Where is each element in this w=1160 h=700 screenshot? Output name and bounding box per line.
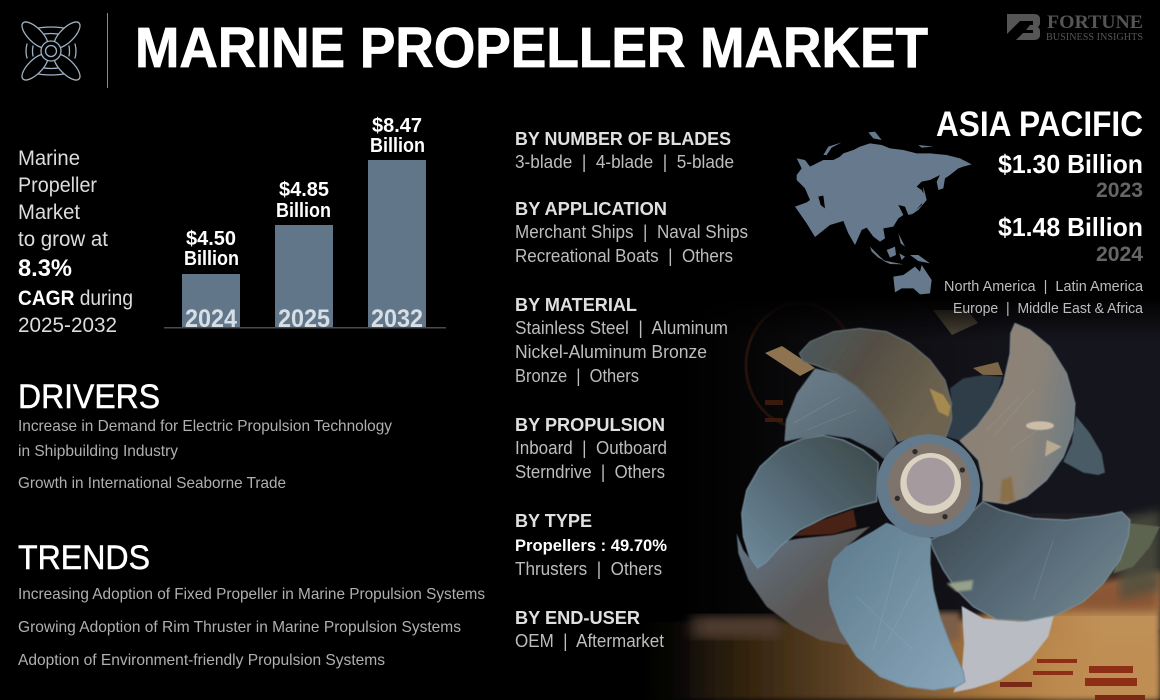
regional stats: $1.30 Billion (998, 149, 1143, 179)
segment: by material: Stainless Steel | Aluminum (515, 318, 728, 338)
drivers panel: Growth in International Seaborne Trade (18, 475, 286, 492)
drivers panel: in Shipbuilding Industry (18, 443, 178, 460)
growth text block: 8.3% (18, 255, 72, 282)
trends panel (18, 539, 485, 669)
photo backdrop: dock and floor (640, 296, 1160, 700)
segment: by number of blades: BY NUMBER OF BLADES (515, 128, 731, 149)
segment: by material: Nickel-Aluminum Bronze (515, 342, 707, 362)
back blade upper right (947, 375, 1003, 441)
trends panel: Growing Adoption of Rim Thruster in Marine Propulsion Systems (18, 619, 461, 636)
segment: by number of blades (515, 128, 734, 172)
bar 2032: Billion (370, 135, 425, 157)
blade left (742, 435, 878, 568)
trends panel: Increasing Adoption of Fixed Propeller in Marine Propulsion Systems (18, 586, 485, 603)
back blade upper left (784, 368, 897, 460)
icon: propeller (18, 18, 84, 84)
segment: by propulsion: Sterndrive | Others (515, 462, 665, 482)
segment: by application (515, 198, 748, 266)
drivers panel: DRIVERS (18, 378, 160, 416)
growth text block: CAGR during (18, 287, 133, 310)
segment: by propulsion: BY PROPULSION (515, 414, 665, 435)
segment: by type: BY TYPE (515, 510, 592, 531)
segment: by application: Recreational Boats | Others (515, 246, 733, 266)
segment: by type (515, 510, 667, 579)
segment: by material: BY MATERIAL (515, 294, 637, 315)
growth text block: Marine (18, 147, 80, 170)
regional stats: 2024 (1096, 243, 1143, 266)
blade right blue (930, 502, 1130, 621)
growth text block: 2025-2032 (18, 314, 117, 337)
growth text block: to grow at (18, 228, 108, 251)
trends panel: TRENDS (18, 539, 150, 577)
back blade bottom white (953, 606, 1054, 692)
hub (877, 434, 980, 538)
bar 2025: Billion (276, 200, 331, 222)
back blade right small (1063, 416, 1105, 475)
back blade lower left (737, 527, 870, 645)
regional stats: 2023 (1096, 179, 1143, 202)
scuff highlights (793, 388, 1062, 650)
trends panel: Adoption of Environment-friendly Propulsion Systems (18, 652, 385, 669)
regional stats (936, 105, 1144, 317)
logo: Fortune Business Insights (1007, 12, 1143, 43)
drivers panel (18, 378, 392, 492)
logo: Fortune Business Insights: FORTUNE (1047, 12, 1143, 33)
segment: by material: Bronze | Others (515, 366, 639, 386)
logo: Fortune Business Insights: BUSINESS INSIGHTS (1046, 32, 1143, 43)
bar 2024: $4.50 (186, 228, 236, 250)
regional stats: Europe | Middle East & Africa (953, 300, 1144, 317)
segment: by end-user: BY END-USER (515, 607, 640, 628)
bar 2032: 2032 (371, 305, 423, 333)
bar 2024: 2024 (185, 305, 237, 333)
bar 2032: $8.47 (372, 115, 422, 137)
segment: by application: Merchant Ships | Naval Ships (515, 222, 748, 242)
growth text block: Market (18, 201, 80, 224)
segment: by material (515, 294, 728, 386)
bar 2024: Billion (184, 248, 239, 270)
title: MARINE PROPELLER MARKET (135, 16, 928, 80)
blade right tan (960, 323, 1075, 504)
growth text block (18, 147, 133, 337)
regional stats: ASIA PACIFIC (936, 105, 1143, 144)
bar 2025: $4.85 (279, 179, 329, 201)
bar 2025 (275, 179, 333, 333)
drivers panel: Increase in Demand for Electric Propulsion Technology (18, 418, 392, 435)
bar chart (164, 115, 446, 333)
blade bottom (828, 523, 965, 690)
segment: by propulsion (515, 414, 667, 482)
growth text block: Propeller (18, 174, 97, 197)
segment: by number of blades: 3-blade | 4-blade | 5-blade (515, 152, 734, 172)
regional stats: North America | Latin America (944, 278, 1144, 295)
segment: by type: Thrusters | Others (515, 559, 662, 579)
back blade far right (1113, 523, 1160, 573)
bar 2024 (182, 228, 240, 333)
segment: by end-user (515, 607, 664, 651)
bar 2025: 2025 (278, 305, 330, 333)
map: Asia Pacific (795, 132, 972, 294)
rust gap (793, 509, 857, 536)
propeller photo illustration (737, 323, 1160, 692)
regional stats: $1.48 Billion (998, 212, 1143, 242)
segment: by application: BY APPLICATION (515, 198, 667, 219)
header divider (107, 13, 108, 88)
segment: by end-user: OEM | Aftermarket (515, 631, 664, 651)
segment: by type: Propellers : 49.70% (515, 536, 667, 555)
blade top brown (799, 328, 952, 442)
segment: by propulsion: Inboard | Outboard (515, 438, 667, 458)
bar 2032 (368, 115, 426, 333)
